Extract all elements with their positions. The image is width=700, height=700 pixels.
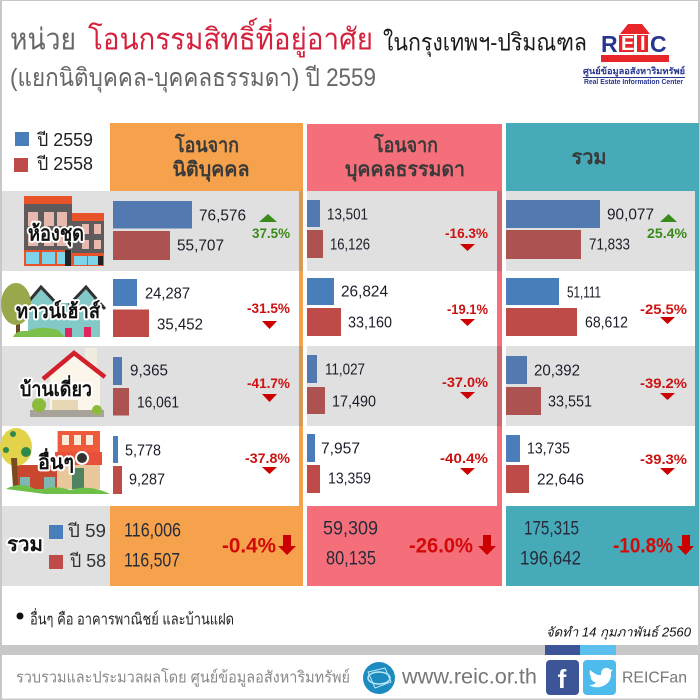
panel: column transfers from individuals: โอนจาก	[373, 133, 438, 157]
change labels: total: 25.4%	[647, 225, 688, 241]
footnote	[16, 608, 234, 628]
bar chart: juristic persons: 9,365	[130, 362, 168, 380]
change labels: juristic persons: -37.8%	[245, 450, 291, 466]
bar chart: individuals	[307, 200, 392, 493]
bar chart: juristic persons: 35,452	[157, 316, 203, 334]
legend: ปี 2559	[37, 130, 93, 150]
panel: total all: -10.8%	[613, 534, 673, 558]
bar chart: individuals: 11,027	[325, 362, 365, 378]
change labels: individuals: -40.4%	[440, 450, 489, 466]
panel: total all	[506, 506, 699, 586]
bar chart: individuals: 13,501	[327, 206, 368, 224]
bar chart: individuals: 7,957	[321, 440, 360, 458]
bar chart: total: 22,646	[537, 472, 584, 488]
panel: column transfers from juristic persons: โอนจาก	[174, 133, 239, 157]
date: จัดทำ 14 กุมภาพันธ์ 2560	[546, 624, 692, 640]
panel: total juristic persons: 116,006	[124, 520, 181, 542]
icon: facebook: f	[558, 664, 567, 694]
bar chart: juristic persons: 16,061	[137, 394, 179, 412]
icon: twitter	[583, 660, 616, 695]
panel: total juristic persons: -0.4%	[222, 534, 276, 558]
panel: totals row label	[2, 506, 110, 586]
panel: totals row label: ปี 59	[68, 521, 106, 541]
icon: condominium: ห้องชุด	[28, 222, 84, 248]
row backgrounds	[2, 191, 698, 506]
icon: townhouse	[1, 283, 105, 337]
bar chart: juristic persons	[113, 201, 246, 494]
logo: REIC	[583, 24, 685, 86]
bar chart: individuals: 33,160	[348, 314, 392, 332]
panel: totals row label: รวม	[7, 534, 43, 556]
website: www.reic.or.th	[401, 666, 537, 688]
social name: REICFan	[622, 670, 687, 686]
panel: total individuals	[307, 506, 502, 586]
icon: other buildings: อื่นๆ	[38, 447, 74, 474]
logo: REIC: I	[640, 33, 646, 55]
panel: total all: 175,315	[524, 518, 579, 540]
bar chart: individuals: 17,490	[332, 394, 376, 410]
panel: column transfers from juristic persons: นิติบุคคล	[172, 159, 250, 182]
icon: globe	[363, 662, 395, 694]
panel: column total: รวม	[572, 147, 606, 169]
title	[10, 18, 587, 93]
panel: total individuals: 59,309	[323, 518, 378, 540]
title: (แยกนิติบุคคล-บุคคลธรรมดา) ปี 2559	[10, 64, 376, 93]
icon: townhouse: ทาวน์เฮ้าส์	[16, 300, 101, 323]
change labels: juristic persons: 37.5%	[252, 225, 291, 241]
bar chart: juristic persons: 24,287	[145, 286, 190, 302]
logo: REIC: Real Estate Information Center	[584, 79, 683, 86]
bar chart: individuals: 26,824	[341, 284, 388, 300]
logo: REIC: R	[601, 31, 618, 57]
panel: column transfers from juristic persons	[110, 123, 303, 506]
legend: ปี 2558	[37, 154, 93, 174]
panel: total juristic persons: 116,507	[124, 550, 180, 572]
source credit: รวบรวมและประมวลผลโดย ศูนย์ข้อมูลอสังหาริมทรัพย์	[16, 668, 350, 688]
title: โอนกรรมสิทธิ์ที่อยู่อาศัย	[88, 18, 373, 58]
panel: total individuals: -26.0%	[409, 534, 473, 558]
legend	[14, 130, 93, 174]
change labels: total: -25.5%	[640, 301, 688, 317]
footnote: อื่นๆ คือ อาคารพาณิชย์ และบ้านแฝด	[30, 608, 234, 628]
bar chart: total	[506, 200, 654, 493]
icon: other buildings	[0, 428, 110, 494]
change labels: individuals: -16.3%	[445, 225, 489, 241]
bar chart: juristic persons: 76,576	[199, 208, 246, 224]
bar chart: total: 33,551	[548, 394, 592, 410]
panel: column transfers from individuals	[307, 124, 502, 506]
bar chart: juristic persons: 5,778	[125, 442, 161, 460]
change labels: individuals	[440, 225, 489, 475]
change labels: total: -39.3%	[640, 451, 688, 467]
bar chart: juristic persons: 9,287	[129, 472, 165, 488]
icon: facebook	[546, 660, 579, 695]
bar chart: total: 90,077	[607, 206, 654, 224]
change labels: total	[640, 214, 688, 475]
title: หน่วย	[10, 24, 76, 56]
footer strip	[2, 645, 699, 655]
bar chart: juristic persons: 55,707	[177, 238, 224, 254]
logo: REIC: E	[621, 33, 634, 55]
logo: REIC: ศูนย์ข้อมูลอสังหาริมทรัพย์	[583, 65, 685, 77]
icon: condominium	[24, 196, 104, 266]
change labels: juristic persons	[245, 214, 291, 474]
change labels: individuals: -37.0%	[442, 374, 489, 390]
panel: totals row label: ปี 58	[70, 551, 106, 571]
bar chart: individuals: 13,359	[328, 470, 371, 488]
change labels: juristic persons: -41.7%	[247, 375, 291, 391]
bar chart: total: 71,833	[589, 236, 630, 254]
panel: total all: 196,642	[520, 548, 581, 570]
icon: detached house: บ้านเดี่ยว	[20, 374, 92, 401]
bar chart: total: 20,392	[534, 362, 580, 380]
change labels: total: -39.2%	[640, 375, 688, 391]
change labels: juristic persons: -31.5%	[247, 300, 291, 316]
bar chart: total: 68,612	[585, 314, 628, 332]
panel: total juristic persons	[110, 506, 303, 586]
title: ในกรุงเทพฯ-ปริมณฑล	[383, 28, 587, 58]
panel: column transfers from individuals: บุคคลธรรมดา	[345, 159, 465, 182]
bar chart: total: 51,111	[567, 284, 601, 302]
logo: REIC: C	[650, 31, 667, 57]
bar chart: total: 13,735	[527, 440, 570, 458]
change labels: individuals: -19.1%	[447, 301, 489, 317]
panel: column total	[506, 123, 699, 506]
icon: detached house	[20, 348, 105, 417]
panel: total individuals: 80,135	[326, 548, 376, 570]
bar chart: individuals: 16,126	[330, 236, 370, 254]
